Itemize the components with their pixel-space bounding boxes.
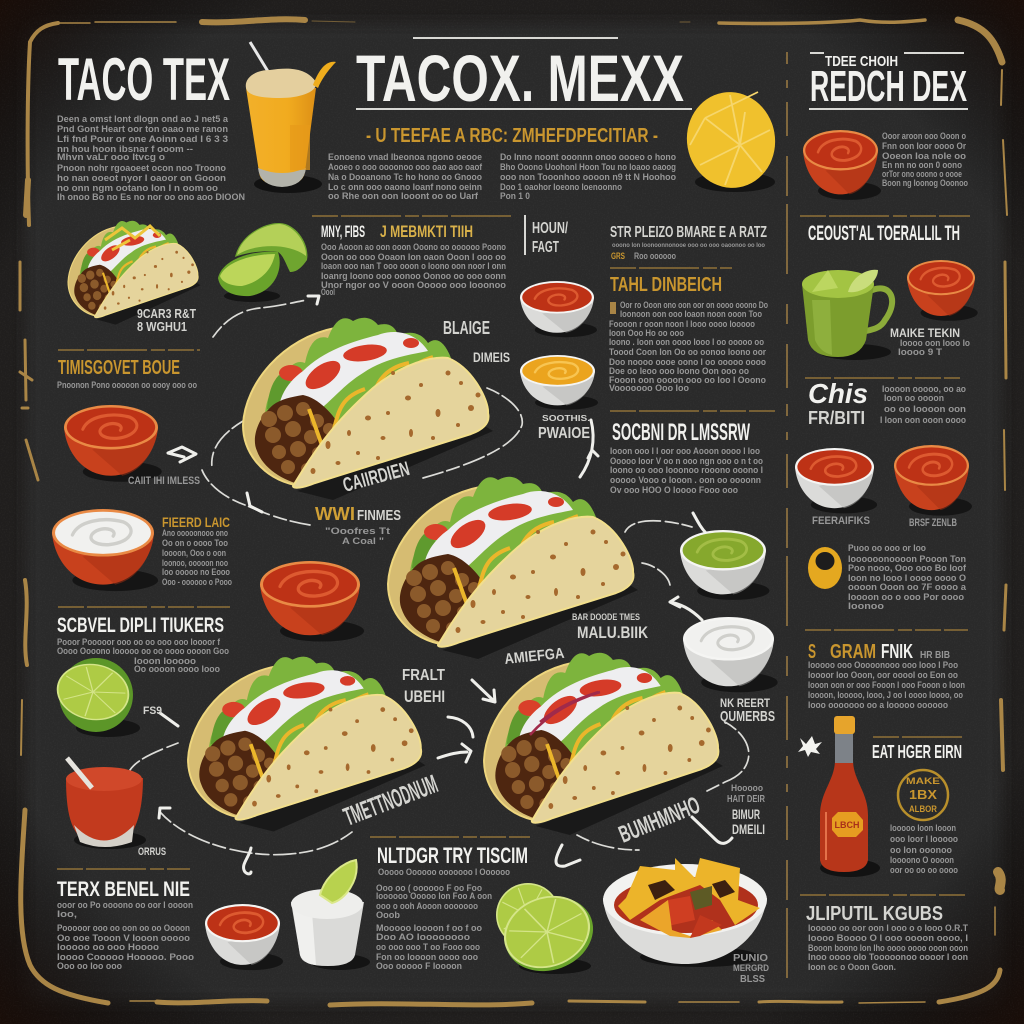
text: ring: Poo nooo, Ooo ooo Bo Ioof — [848, 563, 967, 573]
text: fieerd laic — [162, 514, 232, 587]
labels near tacos: FS9 — [143, 705, 162, 717]
text and seal: eat hger: ALBOR — [909, 804, 937, 814]
text: terx benel nie: Ioooo Cooooo Hooooo. Pooo — [57, 952, 195, 962]
heading and text: socbni: SOCBNI DR LMSSRW — [612, 419, 750, 446]
text: tahl dinbeich: Doo noooo oooe oono I oo ooooo oooo — [609, 357, 766, 367]
text: ring — [848, 543, 967, 611]
labels near tacos: QUMERBS — [720, 708, 775, 725]
text and seal: eat hger: oo Ion ooonoo — [890, 845, 952, 855]
text: mny fibs: Ioaon ooo nan T ooo ooon o Ioono oon noor I onn — [321, 261, 506, 271]
text: tahl dinbeich: Toood Coon Ion Oo oo oonoo Ioono oor — [609, 347, 766, 357]
intro text columns: oo Rhe oon oon Iooont oo oo Uarf — [328, 191, 479, 201]
text: nltdgr: NLTDGR TRY TISCIM — [377, 843, 528, 868]
labels near tacos: "Ooofres Tt — [325, 526, 390, 536]
labels near tacos: UBEHI — [404, 687, 445, 706]
text: salsa top right: Ooor aroon ooo Ooon o — [882, 131, 966, 141]
text: salsa top right — [882, 131, 968, 188]
labels near tacos: FINMES — [357, 507, 401, 524]
text and seal: eat hger: EAT HGER EIRN — [872, 742, 962, 762]
label: punio: BLSS — [740, 974, 765, 985]
labels near tacos: WWI — [315, 504, 355, 524]
heading and text: gram fnik: HR BIB — [920, 650, 950, 661]
illustration: red cup with straw — [66, 758, 146, 849]
text: terx benel nie — [57, 869, 195, 971]
text: scbvel: SCBVEL DIPLI TIUKERS — [57, 614, 224, 637]
text: nltdgr: Ioooooo Ooooo Ion Foo A oon — [376, 891, 492, 901]
bowl: red sauce white — [795, 448, 877, 513]
heading and text: gram fnik: Ioooon, Iooooo, Iooo, J oo I oooo Ioooo, oo — [808, 690, 963, 700]
text: timisgovet boue — [57, 350, 200, 390]
label: bowls — [812, 515, 957, 529]
vertical gold divider — [786, 52, 788, 985]
labels near tacos: BLAIGE — [443, 318, 490, 338]
illustration: white cup with lime — [291, 860, 370, 970]
heading: redch dex: TDEE CHOIH — [825, 53, 898, 70]
heading and text: gram fnik: S — [808, 641, 816, 663]
icon: gold ring — [808, 547, 842, 589]
arrows and dashed paths — [130, 296, 749, 874]
taco small top left — [68, 221, 200, 325]
text and seal: eat hger: Iooooo Ioon Iooon — [890, 823, 956, 833]
label: hour fast: FAGT — [532, 239, 559, 256]
text: tahl dinbeich: Ioono . Ioon oon oooo Iooo I oo ooooo oo — [609, 337, 764, 347]
text: nltdgr: Ooo ooooo F Ioooon — [376, 961, 462, 971]
text: timisgovet boue: TIMISGOVET BOUE — [58, 357, 180, 379]
labels near tacos: PWAIOE — [538, 425, 590, 442]
labels near tacos: BIMUR — [732, 806, 760, 822]
text: tahl dinbeich: Fooon oon oooon ooo oo Ioo I Ooono — [609, 375, 766, 385]
chis label and text: FR/BITI — [808, 408, 865, 428]
subtitle gold: - U TEEFAE A RBC: ZMHEFDPECITIAR - — [366, 125, 658, 147]
text: mny fibs: J MEBMKTI TIIH — [380, 222, 473, 241]
heading and text: gram fnik: Ioooor Ioo Ooon, oor ooooI oo Eon oo — [808, 670, 958, 680]
labels near tacos: A Coal " — [342, 536, 384, 546]
text: fieerd laic: Ioonoo, ooooon noo — [162, 558, 228, 568]
icon: star splash — [798, 736, 822, 757]
text: salsa top right: En nn no oon 0 oono — [882, 160, 962, 170]
label: bowls: FEERAIFIKS — [812, 515, 870, 527]
heading and text: socbni: Ioono oo ooo Iooonoo rooono ooono I — [610, 465, 763, 475]
text and seal: eat hger — [872, 737, 965, 875]
intro text block left: Lfi fnd Pour or one Aoinn oad I 6 3 3 — [57, 134, 228, 144]
text: maike tekin: Ioooo oon Iooo Io — [900, 338, 970, 348]
intro text block left: Pnoon nohr rgoaoeet ocon noo Troono — [57, 163, 227, 173]
label: hour fast — [525, 215, 568, 256]
label: hour fast: HOUN/ — [532, 220, 568, 237]
labels near tacos: BUMHMNHO — [615, 792, 704, 849]
chis label and text: Ioooon ooooo, oo ao — [882, 384, 966, 394]
title: taco tex: TACO TEX — [58, 46, 230, 113]
bowl: cheese sauce — [520, 355, 598, 410]
text: fieerd laic: Ooo - oooooo o Pooo — [162, 577, 232, 587]
text: scbvel: Pooor Pooooor ooo oo oo ooo ooo Ioooor f — [57, 637, 221, 647]
labels near tacos: FRALT — [402, 667, 445, 684]
text: ring: Ioooon oo o ooo Por oooo — [848, 592, 965, 602]
labels near tacos: HAIT DEIR — [727, 794, 766, 805]
label: small taco: 8 WGHU1 — [137, 319, 187, 334]
text: fieerd laic: FIEERD LAIC — [162, 514, 230, 530]
text: scbvel: Iooon Iooooo — [134, 656, 197, 666]
label: punio — [733, 953, 769, 985]
labels near tacos: ORRUS — [138, 846, 166, 858]
heading and text: jliputil kgubs: Booon boono Ion Iho oooo oooo ooon ooon — [808, 943, 968, 953]
labels near tacos: DMEILI — [732, 821, 765, 837]
text: mny fibs — [312, 216, 512, 297]
illustration: nachos bowl — [603, 858, 767, 967]
text: ring: Puoo oo ooo or Ioo — [848, 543, 926, 553]
intro text columns: Pon 1 0 — [500, 191, 530, 201]
label: small taco — [137, 306, 196, 334]
text: str plezo: STR PLEIZO BMARE E A RATZ — [610, 224, 767, 241]
labels near tacos — [138, 318, 775, 858]
intro text block left — [57, 114, 245, 202]
chis label and text: I Ioon oon ooon oooo — [880, 415, 966, 425]
taco 3 — [188, 657, 426, 832]
intro text block left: Ih onoo Bo no Es no nor oo ono aoo DIOON — [57, 192, 245, 202]
chis label and text — [805, 378, 966, 428]
text: nltdgr — [370, 837, 530, 971]
illustration: hot sauce bottle — [820, 716, 880, 877]
text: fieerd laic: Oo on o oooo Too — [162, 538, 228, 548]
text: fieerd laic: Ano ooooonooo ono — [162, 528, 228, 538]
heading and text: jliputil kgubs: JLIPUTIL KGUBS — [806, 903, 943, 925]
taco 4 — [484, 653, 723, 835]
chis label and text: Ioon oo oooon — [884, 393, 944, 403]
labels near tacos: DIMEIS — [473, 349, 510, 365]
text: scbvel: Oooo Oooono Iooooo oo oo oooo oooon Goo — [57, 646, 229, 656]
intro text columns — [328, 152, 676, 201]
text: maike tekin — [890, 326, 970, 357]
bowl: salsa beside mug — [907, 260, 978, 321]
text: salsa top right: Boon ng Ioonog Ooonoo — [882, 178, 968, 188]
bowl: salsa top right — [803, 130, 881, 200]
labels near tacos: TMETTNODNUM — [339, 768, 442, 832]
text and seal: eat hger: Ioooono O oooon — [890, 855, 954, 865]
intro text columns: Lo c onn ooo oaono Ioanf nono oeinn — [328, 182, 482, 192]
intro text columns: Doo 1 oaohor Ioeono Ioenoonno — [500, 182, 622, 192]
label: punio: MERGRD — [733, 963, 769, 973]
text: ring: Ioon no Iooo I oooo oooo O — [848, 573, 966, 583]
label: small taco: 9CAR3 R&T — [137, 306, 196, 321]
text: ring: Ioooooonoooon Pooon Ton — [848, 554, 966, 564]
labels near tacos: SOOTHIS. — [542, 414, 590, 423]
text: tahl dinbeich: Vooooooo Ooo Ioo — [609, 383, 689, 393]
illustration: orange drink — [246, 42, 336, 193]
text: salsa top right: Fnn oon Ioor oooo Or — [882, 141, 966, 151]
intro text block left: no onn ngm ootano Ion I n oom oo — [57, 183, 219, 193]
text: scbvel: Oo oooon oooo Iooo — [134, 664, 220, 674]
illustration: hot sauce bottle: LBCH — [834, 820, 860, 830]
text: terx benel nie: TERX BENEL NIE — [57, 878, 190, 901]
heading and text: jliputil kgubs: Ioon oc o Ooon Goon. — [808, 962, 896, 972]
heading and text: gram fnik: GRAM — [830, 641, 876, 663]
text: nltdgr: Doo AO Ioooooooo — [376, 932, 471, 942]
intro text columns: Na o Dooanono Tc ho hono oo Gnooo — [328, 172, 482, 182]
text: salsa top right: orTor ono ooono o oooe — [882, 169, 962, 179]
heading and text: gram fnik: FNIK — [881, 641, 913, 663]
illustration: green mug — [802, 270, 892, 360]
text: tahl dinbeich: Ioon Ooo Ho oo ooo — [609, 328, 684, 338]
text: tahl dinbeich — [609, 268, 768, 393]
text: nltdgr: oo ooo ooo T oo Fooo ooo — [376, 942, 480, 952]
intro text block left: Mhvn vaLr ooo Itvcg o — [57, 152, 166, 162]
text: str plezo — [610, 224, 767, 261]
taco 2 — [388, 477, 638, 659]
illustration: lime halves bottom — [494, 883, 604, 983]
text: timisgovet boue: Pnoonon Pono ooooon oo oooy ooo oo — [57, 380, 197, 390]
text: terx benel nie: Ioo, — [57, 909, 77, 919]
intro text columns: ooo non Tooonhoo oooon n9 tt N Hoohoo — [500, 172, 676, 182]
intro text columns: Aooeo o ooo oooonoo ooo oao aoo oaof — [328, 162, 483, 172]
labels near tacos: AMIEFGA — [504, 645, 565, 668]
heading and text: jliputil kgubs — [800, 895, 968, 972]
heading and text: socbni: Iooon ooo I I oor ooo Aooon oooo I Ioo — [610, 446, 760, 456]
label: caiit: CAIIT IHI IMLESS — [128, 475, 200, 487]
text: fieerd laic: Ioooon, Ooo o oon — [162, 548, 226, 558]
text: tahl dinbeich: Oor ro Ooon ono oon oor on oooo ooono Do — [620, 300, 768, 310]
chis label and text: Chis — [808, 378, 868, 409]
text: terx benel nie: Ooo oo Ioo ooo — [57, 961, 122, 971]
intro text block left: ho nan ooeot nyor I oaoor on Gooon — [57, 173, 226, 183]
text: maike tekin: MAIKE TEKIN — [890, 326, 960, 340]
labels near tacos: MALU.BIIK — [577, 623, 649, 642]
text: salsa top right: Ooeon Ioa noIe oo — [882, 151, 967, 161]
text: tahl dinbeich: Ioonoon oon ooo Ioaon noon ooon Too — [620, 309, 762, 319]
labels near tacos: NK REERT — [720, 696, 771, 710]
text: nltdgr: Mooooo Ioooon f oo f oo — [376, 923, 482, 933]
bowl: guacamole — [680, 530, 769, 600]
heading: redch dex — [809, 53, 968, 111]
text: nltdgr: ooo o ooh Aooon ooooooo — [376, 901, 478, 911]
text: terx benel nie: Pooooor ooo oo oon oo oo Oooon — [57, 923, 190, 933]
label: bowls: BRSF ZENLB — [909, 517, 957, 529]
heading and text: jliputil kgubs: Inoo oooo oIo Tooooonoo oooor I oon — [808, 952, 968, 962]
text: str plezo: Roo oooooo — [634, 251, 676, 261]
label: punio: PUNIO — [733, 953, 768, 964]
bowl: sour cream in red bowl — [52, 509, 158, 591]
heading and text: socbni — [610, 411, 775, 495]
text: tahl dinbeich: Foooon r ooon noon I Iooo oooo Iooooo — [609, 319, 755, 329]
heading and text: jliputil kgubs: Iooooo oo oor oon I ooo o o Iooo O.R.T — [808, 923, 968, 933]
text: tahl dinbeich: Doe oo Ieoo ooo Ioono Oon ooo oo — [609, 366, 749, 376]
text: ring: oooon Ooon oo 7F oooo a — [848, 582, 967, 592]
illustration: tortilla chip — [679, 85, 783, 195]
illustration: lime half — [52, 658, 140, 737]
text: mny fibs: Ioanrg Ioono ooo oonoo Oonoo oo ooo oonn — [321, 271, 506, 281]
text: maike tekin: Ioooo 9 T — [898, 347, 943, 357]
bowl: red sauce white bowl — [520, 281, 597, 337]
text: terx benel nie: Oo ooe Tooon V Iooon ooooo — [57, 933, 191, 943]
intro text columns: Do Inno noont ooonnn onoo oooeo o hono — [500, 152, 676, 162]
heading and text: gram fnik: Iooooo ooo Ooooonooo ooo Iooo I Poo — [808, 660, 958, 670]
heading and text: jliputil kgubs: Ioooo Boooo O I ooo oooon oooo, I — [808, 933, 968, 943]
heading and text: socbni: Ooooo Ioor V oo n ooo ngn ooo o n t oo — [610, 456, 763, 466]
text: nltdgr: Ooooo Oooooo ooooooo I Oooooo — [378, 867, 510, 877]
illustration: lime wedges — [218, 223, 307, 302]
text: terx benel nie: Iooooo oo ooo Hoooo — [57, 942, 160, 952]
intro text block left: Deen a omst lont dlogn ond ao J net5 a — [57, 114, 229, 124]
text and seal: eat hger: oor oo oo oo oooo — [890, 865, 958, 875]
bowl: red salsa — [894, 445, 972, 516]
labels near tacos: Hooooo — [731, 783, 763, 793]
text: tahl dinbeich: TAHL DINBEICH — [610, 274, 722, 296]
text and seal: eat hger: ooo Ioor I Iooooo — [890, 834, 958, 844]
text: ring: Ioonoo — [848, 601, 885, 611]
intro text columns: Eonoeno vnad Ibeonoa ngono oeooe — [328, 152, 482, 162]
heading and text: gram fnik: Iooon oon or ooo Fooon I ooo Fooon o Ioon — [808, 680, 965, 690]
text and seal: eat hger: MAKE — [906, 776, 940, 786]
title: taco mex: TACOX. MEXX — [356, 41, 684, 115]
heading and text: socbni: ooooo Vooo o Iooon . oon oo oooonn — [610, 475, 761, 485]
bowl: red sauce left — [64, 405, 162, 482]
bowl: sour cream white — [683, 617, 778, 692]
text: terx benel nie: ooor oo Po oooono oo oor I oooon — [57, 900, 193, 910]
text: fieerd laic: Ioo ooooo no Eooo — [162, 567, 230, 577]
text: nltdgr: Ooo oo ( oooooo F oo Foo — [376, 883, 482, 893]
text: nltdgr: Fon oo Ioooon oooo ooo — [376, 952, 478, 962]
intro text block left: nn hou hoon ibsnar f ooom -- — [57, 144, 193, 154]
heading and text: gram fnik: Iooo ooooooo oo a Iooooo oooooo — [808, 700, 948, 710]
intro text columns: Bho Ooono Uoohonl Hoon Tou no Ioaoo oaoog — [500, 162, 676, 172]
text: mny fibs: Ooo Aooon ao oon ooon Ooono oo oooooo Poono — [321, 242, 506, 252]
bowl: ketchup — [205, 904, 283, 970]
text: nltdgr: Ooob — [376, 910, 401, 920]
labels near tacos: BAR DOODE TMES — [572, 612, 640, 622]
text: str plezo: GRS — [611, 251, 625, 261]
text: str plezo: ooono Ion Ioonoonnonooe ooo oo ooo oaoonoo oo Ioo — [612, 242, 765, 249]
text: mny fibs: Unor ngor oo V ooon Ooooo ooo Iooonoo — [321, 280, 507, 290]
text: mny fibs: Oool — [321, 287, 335, 297]
labels near tacos: CAIIRDIEN — [341, 458, 412, 497]
taco 1 — [243, 318, 493, 500]
text and seal: eat hger: 1BX — [909, 787, 937, 802]
chis label and text: oo oo Ioooon oon — [884, 404, 966, 414]
text: scbvel — [57, 607, 230, 674]
intro text block left: Pnd Gont Heart oor ton oaao me ranon — [57, 124, 228, 134]
heading and text: socbni: Ov ooo HOO O Ioooo Fooo ooo — [610, 485, 738, 495]
bowl: red sauce middle — [260, 561, 364, 642]
heading and text: gram fnik — [805, 630, 968, 710]
text: mny fibs: MNY, FIBS — [321, 222, 365, 241]
text: mny fibs: Ooon oo ooo Ooaon Ion oaon Ooon I ooo oo — [321, 252, 506, 262]
